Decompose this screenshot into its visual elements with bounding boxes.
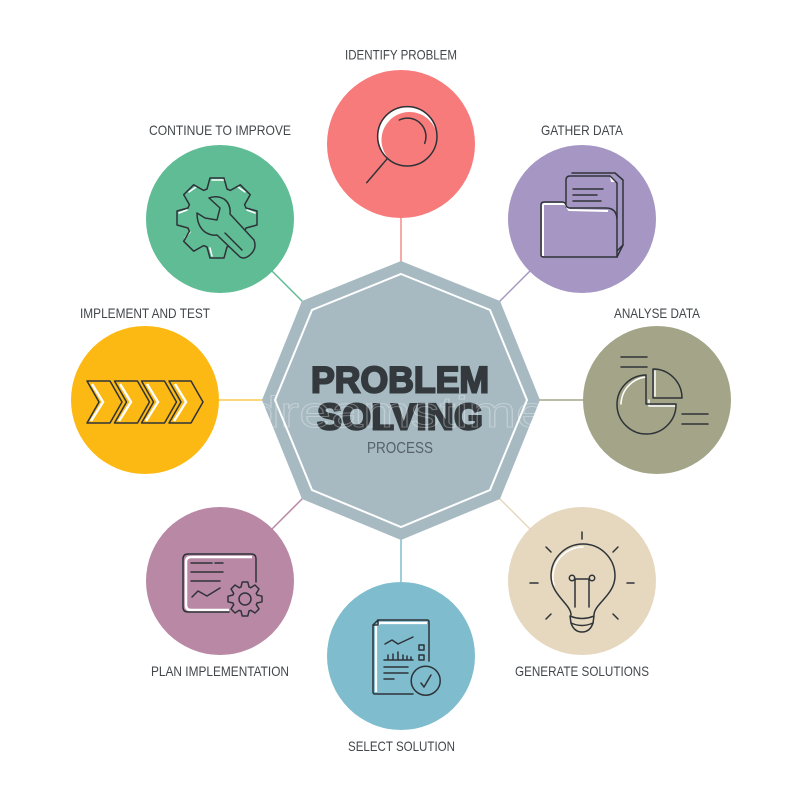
icon: screen with gear (183, 554, 262, 616)
connector lines (216, 216, 585, 585)
step: select solution (327, 582, 475, 754)
circle: select solution (327, 582, 475, 730)
icon: four chevron arrows (87, 381, 203, 423)
icon: magnifying glass (367, 107, 438, 183)
title: problem: PROBLEM (311, 360, 489, 400)
icon: folder with documents (541, 173, 623, 257)
label: gather data: GATHER DATA (541, 122, 624, 138)
subtitle: process: PROCESS (367, 440, 433, 457)
label: select solution: SELECT SOLUTION (348, 738, 455, 754)
label: identify problem: IDENTIFY PROBLEM (345, 46, 457, 62)
step: analyse data (583, 305, 731, 474)
circle: gather data (508, 145, 656, 293)
circle: implement and test (71, 326, 219, 474)
label: continue to improve: CONTINUE TO IMPROVE (149, 122, 291, 138)
circle: plan implementation (146, 507, 294, 655)
label: implement and test: IMPLEMENT AND TEST (80, 305, 210, 321)
icon: gear with wrench (177, 178, 257, 258)
step: implement and test (71, 305, 219, 474)
step: gather data (508, 122, 656, 293)
label: analyse data: ANALYSE DATA (614, 305, 701, 321)
icon: light bulb (530, 532, 634, 632)
step: plan implementation (146, 507, 294, 679)
circle: generate solutions (508, 507, 656, 655)
label: plan implementation: PLAN IMPLEMENTATION (151, 663, 289, 679)
circle: analyse data (583, 326, 731, 474)
circle: continue to improve (146, 145, 294, 293)
circle: identify problem (327, 70, 475, 218)
central octagon (262, 261, 540, 540)
step: continue to improve (146, 122, 294, 293)
icon: pie chart (617, 357, 708, 434)
label: generate solutions: GENERATE SOLUTIONS (515, 663, 649, 679)
title: solving: SOLVING (317, 396, 483, 438)
step: generate solutions (508, 507, 656, 679)
step: identify problem (327, 46, 475, 218)
icon: report with check mark (373, 620, 440, 695)
watermark: dreamstime (248, 388, 548, 437)
